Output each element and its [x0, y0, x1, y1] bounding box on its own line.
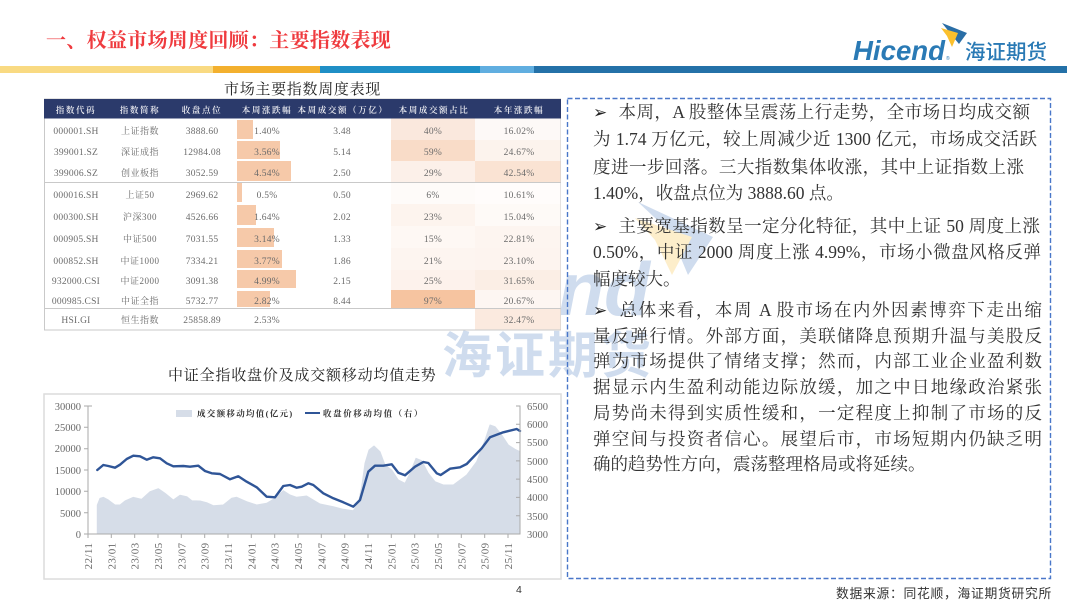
row: 沪深300: 000300.SH	[53, 213, 99, 223]
x axis labels: 22/11	[83, 543, 95, 569]
right axis labels: 4500	[527, 475, 548, 486]
row: 上证指数: 上证指数	[121, 125, 159, 136]
paragraph 3: 局势尚未得到实质性缓和，一定程度上抑制了市场的反	[593, 403, 1042, 423]
row: 中证500: 22.81%	[504, 235, 534, 245]
right axis labels: 3500	[527, 512, 548, 523]
row: 中证500: 15%	[424, 235, 442, 245]
row: 中证2000: 25%	[424, 277, 442, 287]
area: 成交额移动均值	[97, 425, 520, 534]
logo: Hicend 海证期货: Hicend	[853, 35, 946, 66]
left axis labels: 15000	[55, 466, 81, 477]
row: 深证成指: 深证成指	[121, 146, 159, 157]
row: 中证全指: 8.44	[333, 297, 351, 307]
row: 中证2000: 932000.CSI	[52, 277, 100, 287]
row: 中证1000: 1.86	[333, 257, 351, 267]
paragraph 3: 确的趋势性方向，震荡整理格局或将延续。	[593, 454, 926, 474]
row: 中证2000: 4.99%	[254, 277, 280, 287]
x axis labels: 25/05	[433, 542, 445, 570]
paragraph 3: ➢	[593, 301, 607, 321]
row: 创业板指: 29%	[424, 169, 442, 179]
row: 中证全指: 000985.CSI	[52, 297, 100, 307]
row: 恒生指数: 2.53%	[254, 316, 280, 326]
paragraph 3: 据显示内生盈利动能边际放缓，加之中日地缘政治紧张	[593, 377, 1042, 397]
row: 中证全指: 20.67%	[504, 297, 534, 307]
x axis labels: 25/07	[456, 542, 468, 570]
row: 上证50: 6%	[426, 191, 440, 201]
right axis labels: 5500	[527, 438, 548, 449]
row: 上证50: 10.61%	[504, 191, 534, 201]
legend	[176, 408, 424, 418]
row: 沪深300: 4526.66	[186, 213, 218, 223]
row: 创业板指	[54, 161, 560, 182]
paragraph 1: 1.40%，收盘点位为 3888.60 点。	[593, 183, 844, 203]
left axis labels: 0	[76, 530, 81, 541]
left axis labels: 5000	[60, 509, 81, 520]
x axis labels: 23/03	[130, 542, 142, 570]
row: 沪深300: 15.04%	[504, 213, 534, 223]
right axis labels: 6000	[527, 420, 548, 431]
x axis labels: 23/11	[223, 543, 235, 569]
chart heading: 中证全指收盘价及成交额移动均值走势	[168, 368, 437, 384]
row: 上证50: 0.50	[333, 191, 351, 201]
watermark: Hicend logo: Hicend	[400, 247, 652, 331]
row: 创业板指: 4.54%	[254, 169, 280, 179]
left axis labels: 20000	[55, 444, 81, 455]
header stripe	[0, 66, 1067, 73]
paragraph 3: 量反弹行情。外部方面，美联储降息预期升温与美股反	[593, 326, 1042, 346]
row: 中证500: 7031.55	[186, 235, 218, 245]
table header: 指数代码	[56, 105, 96, 115]
x axis labels: 24/09	[340, 542, 352, 570]
right axis labels: 4000	[527, 493, 548, 504]
table header: 本周涨跌幅	[242, 105, 292, 115]
table header: 收盘点位	[182, 105, 222, 115]
paragraph 2: 幅度较大。	[593, 269, 680, 289]
row: 创业板指: 创业板指	[121, 167, 159, 178]
x axis labels: 24/03	[270, 542, 282, 570]
row: 中证500: 1.33	[333, 235, 351, 245]
row: 上证指数: 40%	[424, 127, 442, 137]
page number: 4	[516, 584, 522, 596]
paragraph 2: 主要宽基指数呈一定分化特征，其中上证 50 周度上涨	[618, 216, 1040, 236]
legend: 成交额移动均值(亿元)	[197, 408, 293, 418]
row: 上证指数: 000001.SH	[53, 127, 99, 137]
x axis labels: 25/11	[503, 543, 515, 569]
row: 中证全指: 5732.77	[186, 297, 218, 307]
row: 中证2000: 3091.38	[186, 277, 218, 287]
row: 上证50: 2969.62	[186, 191, 218, 201]
row: 中证1000: 23.10%	[504, 257, 534, 267]
data source: 数据来源：同花顺，海证期货研究所	[836, 586, 1052, 601]
left axis labels	[55, 402, 81, 541]
x axis labels: 23/01	[106, 542, 118, 570]
right axis labels: 5000	[527, 457, 548, 468]
row: 深证成指: 24.67%	[504, 148, 534, 158]
x axis labels: 25/03	[410, 542, 422, 570]
row: 上证指数: 3888.60	[186, 127, 218, 137]
paragraph 2: 0.50%，中证 2000 周度上涨 4.99%，市场小微盘风格反弹	[593, 242, 1041, 262]
row: 上证50: 上证50	[125, 189, 155, 200]
row: 创业板指: 42.54%	[504, 169, 534, 179]
x axis labels: 25/09	[480, 542, 492, 570]
row: 恒生指数: HSI.GI	[61, 316, 91, 326]
row: 上证50: 0.5%	[257, 191, 277, 201]
row: 沪深300: 1.64%	[254, 213, 280, 223]
row: 中证1000: 21%	[424, 257, 442, 267]
row: 中证500: 3.14%	[254, 235, 280, 245]
logo: Hicend 海证期货: ®	[946, 55, 950, 62]
row: 中证1000: 3.77%	[254, 257, 280, 267]
row: 上证指数	[53, 118, 560, 140]
table header: 指数简称	[120, 105, 160, 115]
row: 中证2000: 中证2000	[120, 275, 160, 286]
paragraph 2: ➢	[593, 217, 607, 237]
table header: 本周成交额占比	[399, 105, 469, 115]
x axis labels: 23/05	[153, 542, 165, 570]
row: 上证指数: 3.48	[333, 127, 351, 137]
logo: Hicend 海证期货	[853, 23, 1047, 66]
left axis labels: 30000	[55, 402, 81, 413]
row: 中证全指	[52, 290, 560, 308]
row: 中证1000: 7334.21	[186, 257, 218, 267]
row: 恒生指数	[61, 309, 560, 330]
logo: Hicend 海证期货: 海证期货	[965, 35, 1047, 65]
row: 深证成指: 5.14	[333, 148, 351, 158]
row: 中证2000	[52, 270, 560, 290]
legend: 收盘价移动均值（右）	[323, 408, 424, 418]
x axis labels: 24/01	[246, 542, 258, 570]
row: 深证成指	[54, 140, 560, 161]
x axis labels: 25/01	[386, 542, 398, 570]
x axis labels: 23/07	[176, 542, 188, 570]
row: 恒生指数: 25858.89	[183, 316, 221, 326]
row: 中证500: 中证500	[123, 233, 157, 244]
right axis labels: 6500	[527, 402, 548, 413]
paragraph 1: 为 1.74 万亿元，较上周减少近 1300 亿元，市场成交活跃	[593, 129, 1037, 149]
left axis labels: 10000	[55, 487, 81, 498]
x axis labels: 24/07	[316, 542, 328, 570]
row: 上证50	[53, 183, 560, 204]
row: 中证500	[53, 226, 560, 248]
axes	[84, 406, 520, 538]
row: 中证全指: 2.82%	[254, 297, 280, 307]
paragraph 1: 本周，A 股整体呈震荡上行走势，全市场日均成交额	[618, 102, 1030, 122]
x axis labels: 24/05	[293, 542, 305, 570]
row: 中证2000: 31.65%	[504, 277, 534, 287]
row: 深证成指: 59%	[424, 148, 442, 158]
row: 上证50: 000016.SH	[53, 191, 99, 201]
line: 收盘价移动均值	[97, 429, 520, 507]
row: 深证成指: 3.56%	[254, 148, 280, 158]
x axis labels	[83, 542, 515, 570]
row: 上证指数: 16.02%	[504, 127, 534, 137]
watermark: Hicend logo: 海证期货	[442, 316, 654, 388]
paragraph 3: 总体来看，本周 A 股市场在内外因素博弈下走出缩	[618, 300, 1042, 320]
right axis labels	[527, 402, 548, 541]
row: 中证2000: 2.15	[333, 277, 351, 287]
row: 深证成指: 12984.08	[183, 148, 221, 158]
paragraph 1: ➢	[593, 103, 607, 123]
row: 沪深300	[53, 204, 560, 226]
row: 沪深300: 23%	[424, 213, 442, 223]
paragraph 3: 弹空间与投资者信心。展望后市，市场短期内仍缺乏明	[593, 429, 1042, 449]
left axis labels: 25000	[55, 423, 81, 434]
paragraph 3: 弹为市场提供了情绪支撑；然而，内部工业企业盈利数	[593, 351, 1042, 371]
row: 中证1000	[53, 248, 560, 270]
row: 中证1000: 中证1000	[120, 255, 160, 266]
row: 中证全指: 97%	[424, 297, 442, 307]
table heading: 市场主要指数周度表现	[224, 82, 381, 98]
row: 创业板指: 3052.59	[186, 169, 218, 179]
x axis labels: 24/11	[363, 543, 375, 569]
row: 沪深300: 2.02	[333, 213, 351, 223]
row: 沪深300: 沪深300	[123, 211, 157, 222]
row: 上证指数: 1.40%	[254, 127, 280, 137]
table header	[44, 99, 561, 118]
row: 深证成指: 399001.SZ	[54, 148, 98, 158]
x axis labels: 23/09	[200, 542, 212, 570]
table header: 本周成交额（万亿）	[298, 105, 388, 115]
table header: 本年涨跌幅	[494, 105, 544, 115]
row: 恒生指数: 恒生指数	[121, 314, 159, 325]
row: 中证全指: 中证全指	[121, 295, 159, 306]
row: 中证1000: 000852.SH	[53, 257, 99, 267]
row: 创业板指: 399006.SZ	[54, 169, 98, 179]
right axis labels: 3000	[527, 530, 548, 541]
title: 一、权益市场周度回顾：主要指数表现	[46, 30, 391, 52]
row: 中证500: 000905.SH	[53, 235, 99, 245]
row: 恒生指数: 32.47%	[504, 316, 534, 326]
paragraph 1: 度进一步回落。三大指数集体收涨，其中上证指数上涨	[593, 157, 1024, 177]
row: 创业板指: 2.50	[333, 169, 351, 179]
